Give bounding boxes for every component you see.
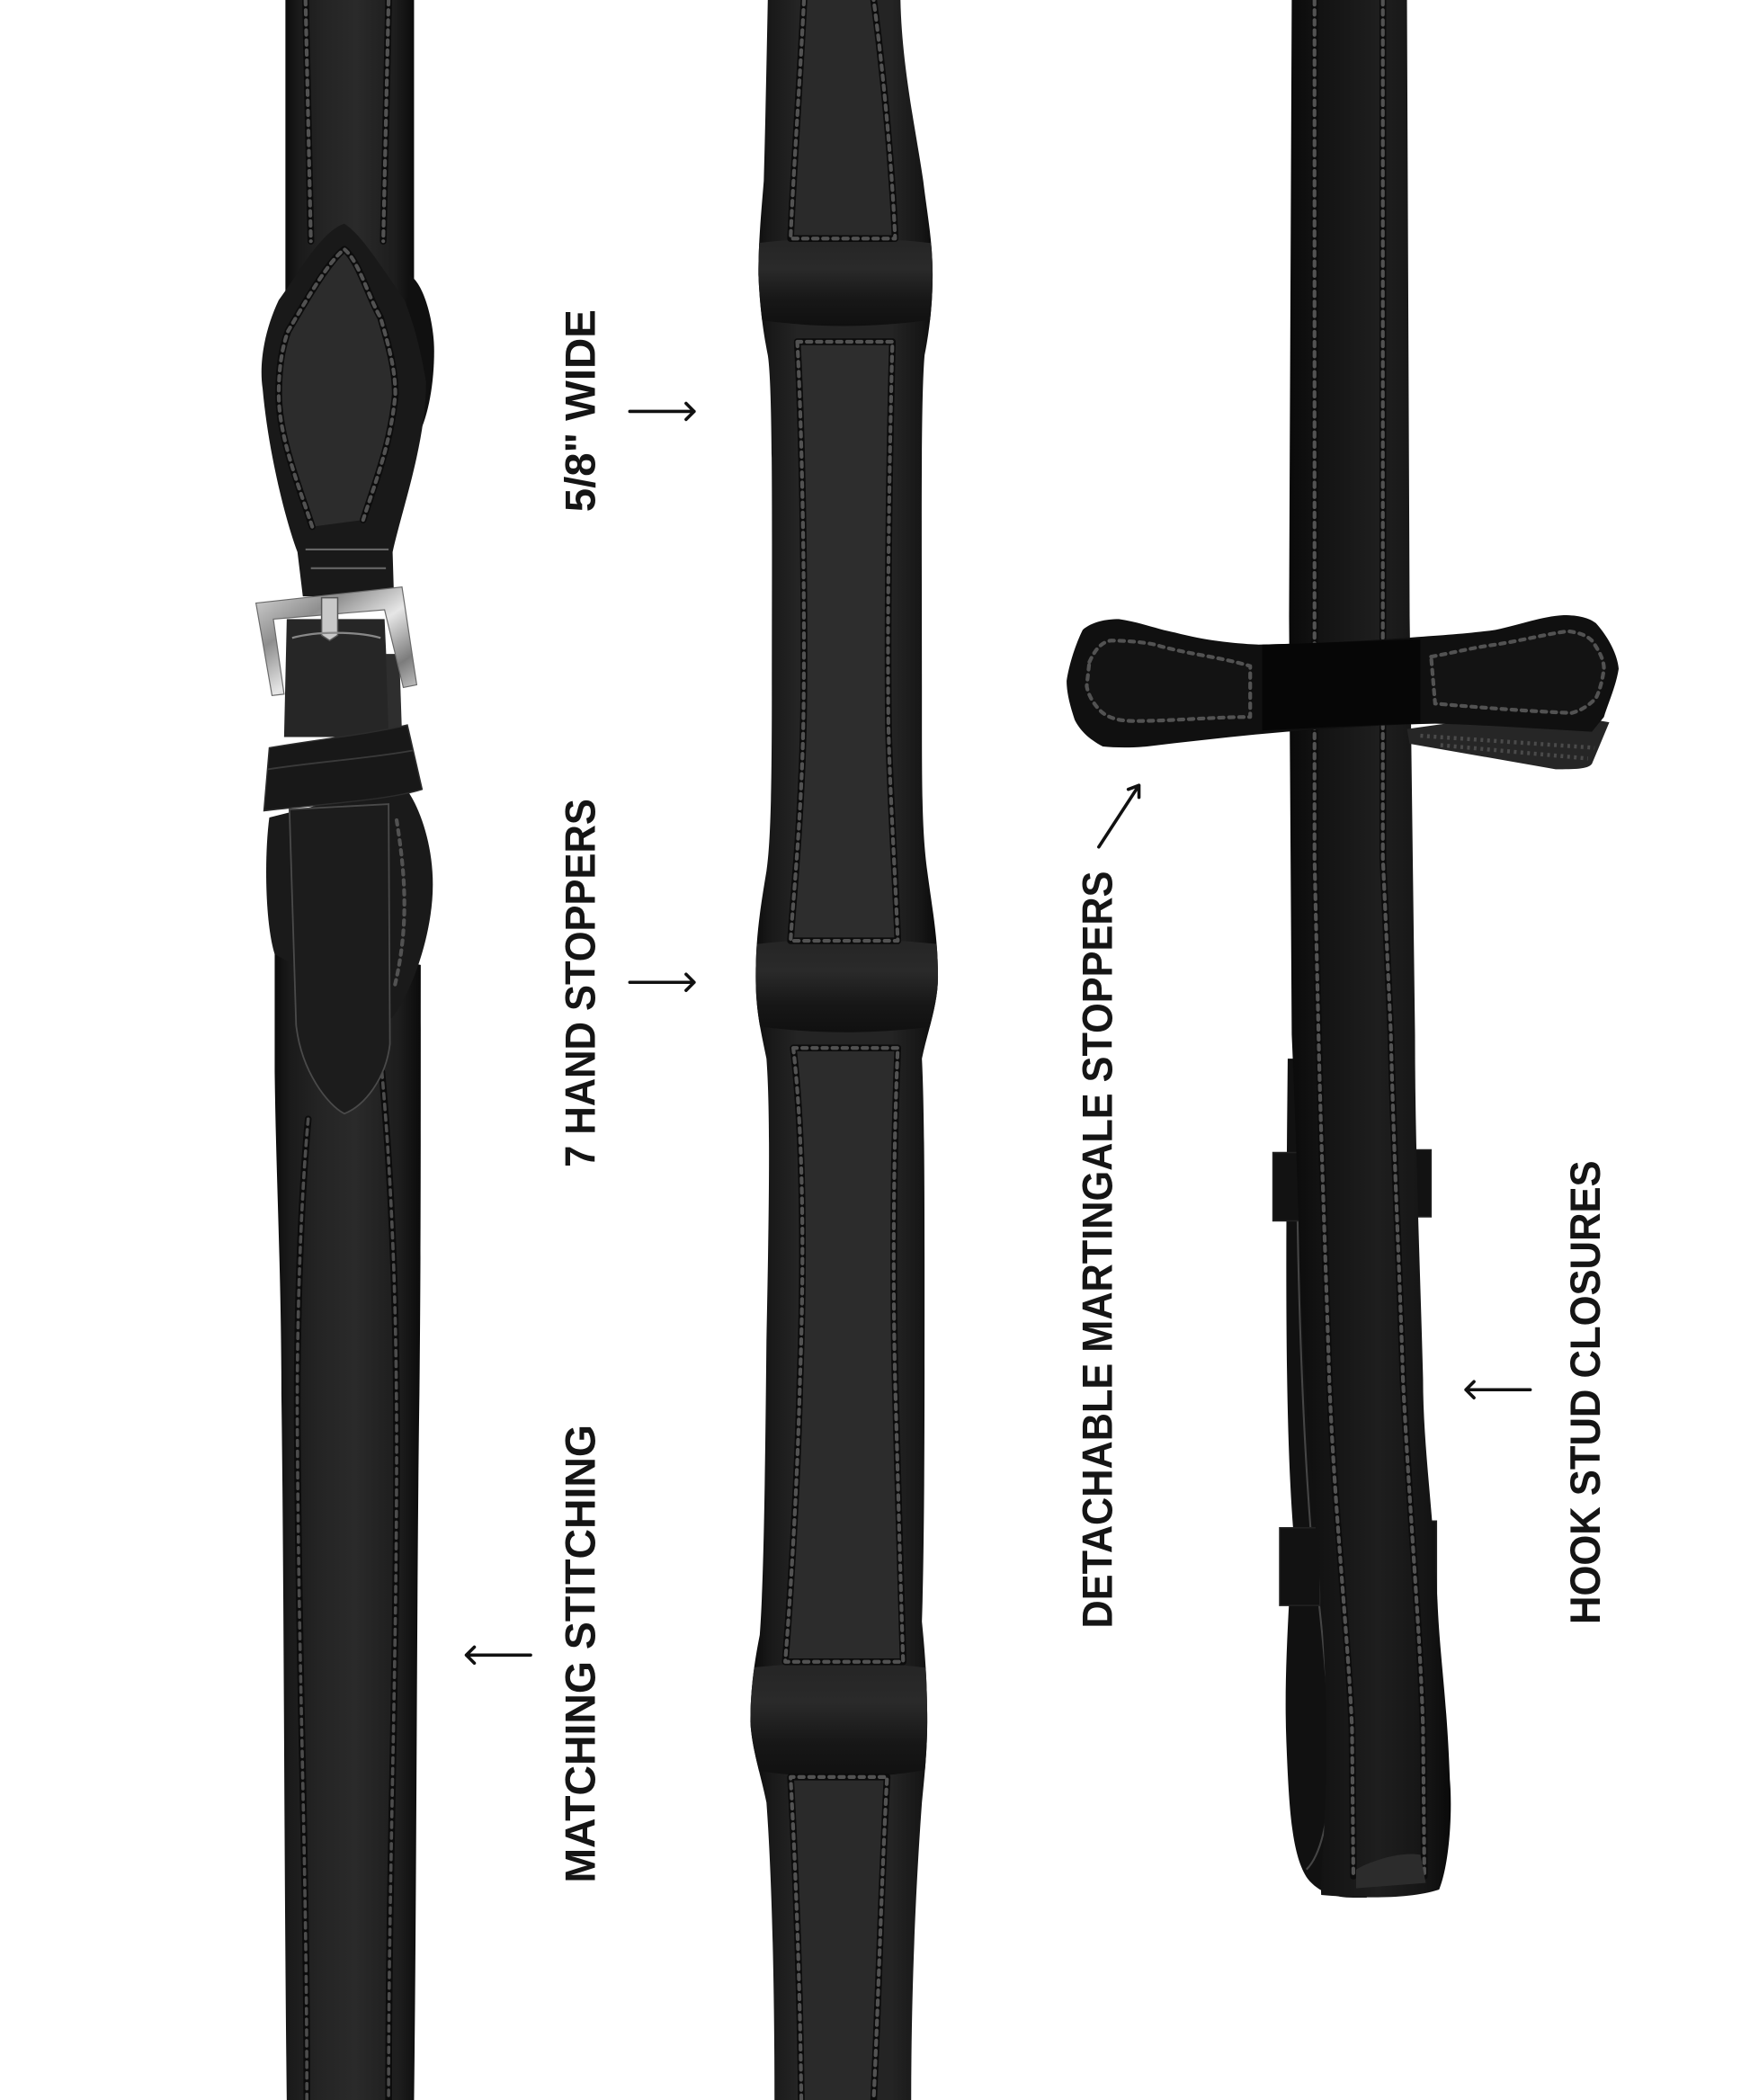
- loop inner edge highlight: [1297, 1152, 1331, 1870]
- arrow: matching stitching: [467, 1647, 531, 1663]
- centre band: [1263, 639, 1420, 730]
- infographic canvas: [255, 0, 1619, 2100]
- upper hook stud keeper right: [1407, 1150, 1431, 1217]
- label: hook stud closures: HOOK STUD CLOSURES: [1562, 1160, 1610, 1624]
- label: 7 hand stoppers: 7 HAND STOPPERS: [558, 799, 605, 1167]
- stopper 1: [758, 241, 933, 326]
- pointed leather keeper: [262, 224, 426, 596]
- label: detachable martingale stoppers: DETACHABLE MARTINGALE STOPPERS: [1075, 871, 1122, 1628]
- keeper band: [264, 725, 422, 811]
- right stitched panel: [1431, 631, 1604, 713]
- rear billet behind keeper: [266, 784, 433, 1018]
- leather tongue: [290, 804, 390, 1113]
- lower hook stud keeper left: [1280, 1528, 1320, 1605]
- billet under buckle: [284, 619, 390, 737]
- upper hook stud keeper left: [1273, 1152, 1302, 1220]
- upper strap section: [285, 0, 414, 348]
- silver buckle: [256, 587, 416, 695]
- main strap: [1289, 0, 1451, 1898]
- arrow: 7 hand stoppers: [629, 974, 694, 990]
- lower strap section: [274, 938, 421, 2100]
- stitching lines: [1315, 0, 1424, 1876]
- label: matching stitching: MATCHING STITCHING: [558, 1425, 605, 1883]
- lower hook stud keeper right: [1420, 1521, 1436, 1597]
- stitched panel 4: [790, 1777, 887, 2100]
- stitched panel 2: [790, 342, 897, 941]
- rein silhouette: [750, 0, 938, 2100]
- rear fold of upper keeper: [399, 274, 434, 435]
- stopper 2: [750, 939, 944, 1032]
- left stitched panel: [1086, 640, 1250, 721]
- stitched panel 3: [785, 1048, 903, 1662]
- rear of martingale stopper: [1407, 710, 1610, 769]
- right rein with loop end: [1067, 0, 1619, 1898]
- left rein with buckle: [256, 0, 434, 2100]
- detachable martingale stopper: [1067, 615, 1619, 747]
- rear loop strap: [1286, 1059, 1367, 1898]
- label: 5/8 inch wide: 5/8" WIDE: [558, 309, 605, 512]
- stitched panel 1: [790, 0, 895, 238]
- centre rein with hand stoppers: [744, 0, 944, 2100]
- stopper 3: [744, 1662, 932, 1777]
- arrow: detachable martingale stoppers: [1099, 785, 1139, 847]
- arrow: hook stud closures: [1466, 1381, 1531, 1398]
- buckle hinge: [386, 654, 402, 735]
- glossy end highlight: [1356, 1854, 1425, 1889]
- arrow: 5/8 inch wide: [629, 404, 694, 419]
